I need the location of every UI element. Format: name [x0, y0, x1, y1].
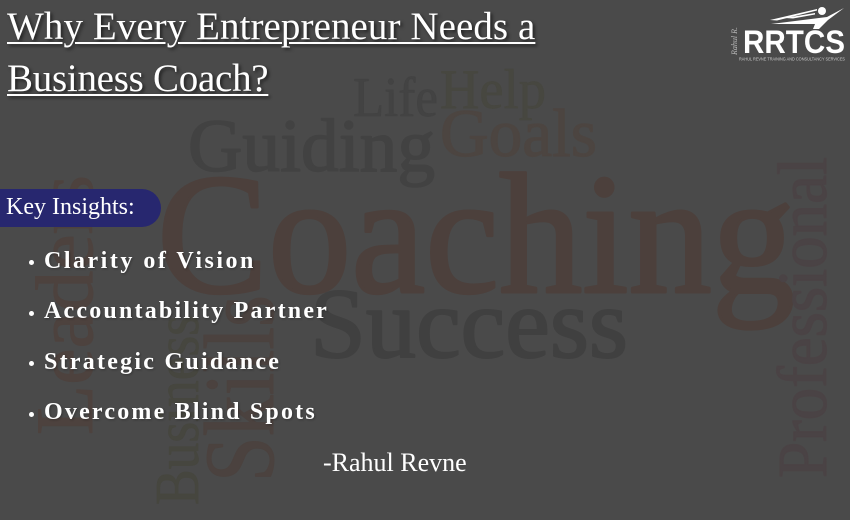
logo letters: RRTCS — [743, 24, 845, 60]
list item: Clarity of Vision — [44, 248, 256, 274]
logo: RRTCS — [730, 7, 845, 62]
title: Why Every Entrepreneur Needs a — [7, 5, 535, 48]
word: Business: Business — [144, 315, 212, 505]
list item: Overcome Blind Spots — [44, 399, 317, 425]
word: Life: Life — [353, 67, 438, 129]
word: Skills: Skills — [184, 295, 295, 482]
title: Business Coach? — [7, 57, 268, 100]
logo signature: Rahul R. — [730, 27, 739, 56]
author attribution: -Rahul Revne — [323, 448, 467, 477]
icon: swoosh figure — [770, 7, 844, 29]
word: Professional: Professional — [765, 157, 842, 478]
callout: Key Insights — [0, 189, 161, 227]
word: Leaders: Leaders — [19, 175, 110, 435]
list item: Strategic Guidance — [44, 349, 281, 375]
word: Guiding: Guiding — [188, 105, 435, 188]
word: Success: Success — [310, 268, 628, 379]
title — [7, 5, 538, 100]
callout: Key Insights: Key Insights: — [6, 194, 135, 220]
word: Goals: Goals — [440, 95, 597, 171]
list item: Accountability Partner — [44, 298, 329, 324]
word: Help: Help — [440, 59, 546, 121]
list: key insights — [29, 248, 329, 426]
word: Coaching: Coaching — [157, 140, 795, 330]
